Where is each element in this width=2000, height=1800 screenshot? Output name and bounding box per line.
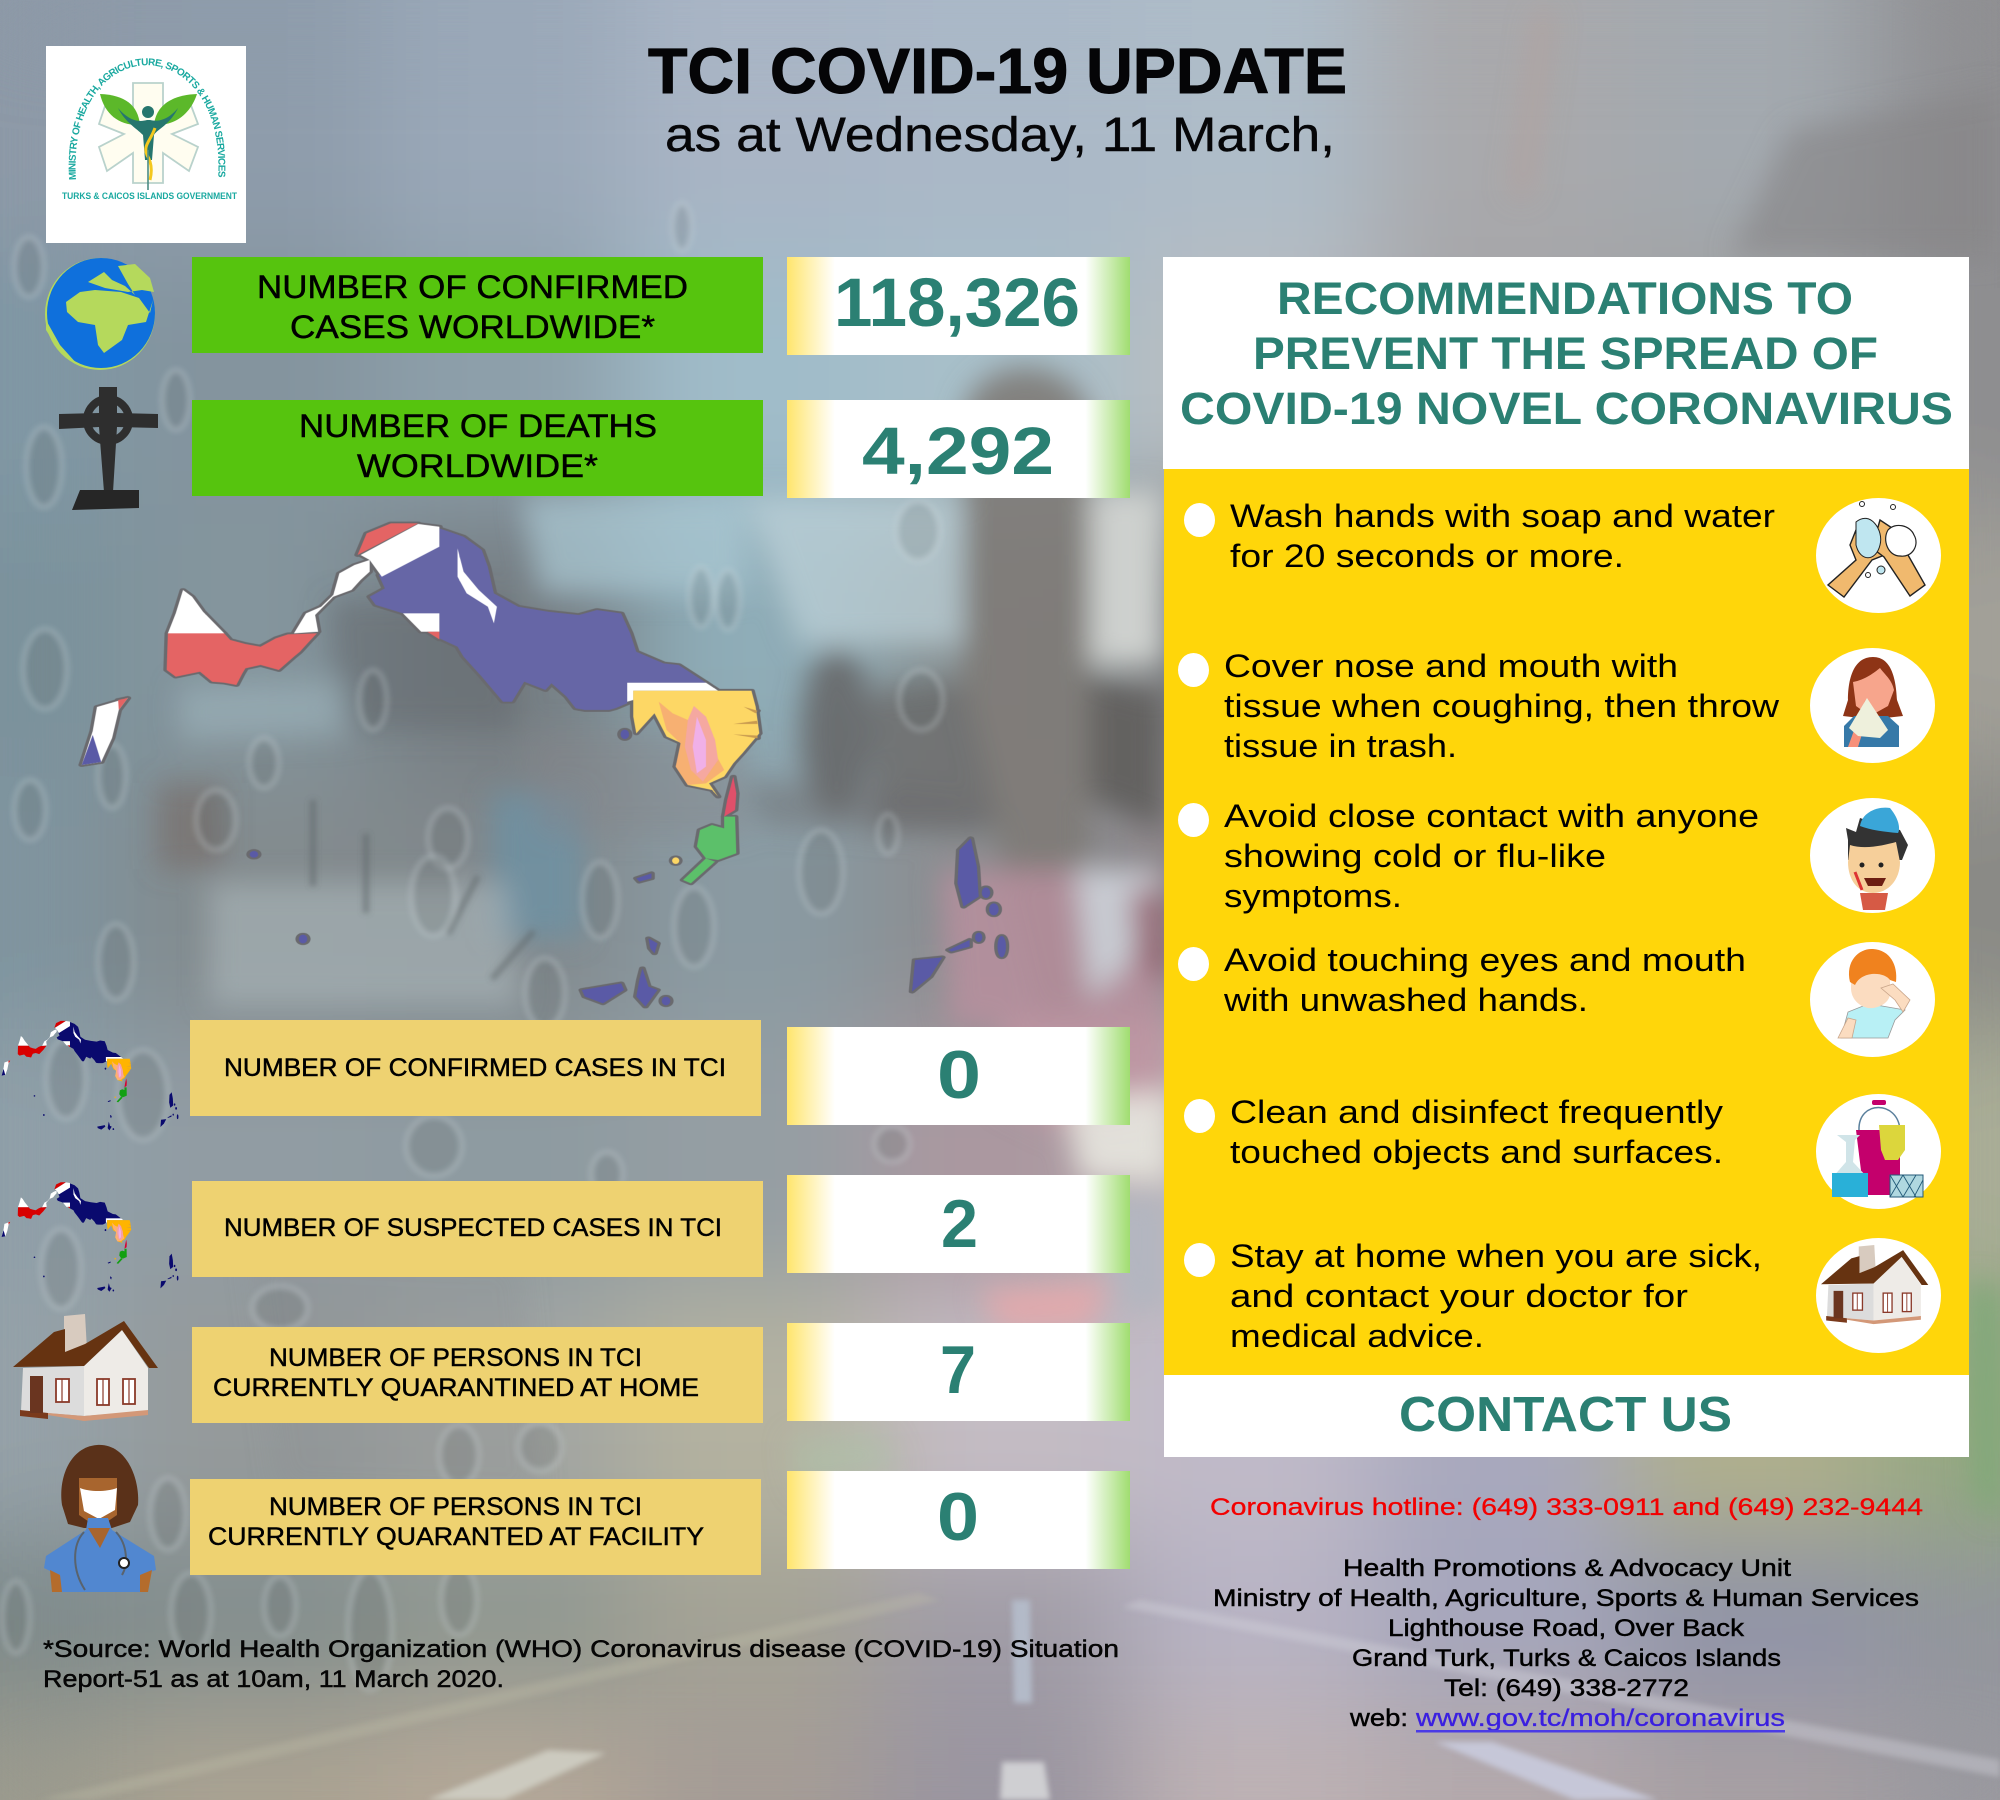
icon: washing hands xyxy=(1816,498,1941,613)
recommendation: stay at home: and contact your doctor for xyxy=(1230,1278,1688,1314)
stat: confirmed cases worldwide: CASES WORLDWIDE* xyxy=(290,309,655,345)
icon: house in circle xyxy=(1816,1238,1941,1353)
recommendation: avoid close contact: Avoid close contact with anyone xyxy=(1224,798,1759,834)
logo: ministry emblem xyxy=(46,46,246,243)
stat: confirmed cases worldwide xyxy=(192,257,1130,355)
icon: cleaning supplies xyxy=(1816,1094,1941,1209)
stat: quarantined at facility: 0 xyxy=(937,1479,979,1555)
icon: woman with tissue xyxy=(1810,648,1935,763)
recommendation: wash hands xyxy=(1184,498,1775,574)
subtitle: date: as at Wednesday, 11 March, xyxy=(665,109,1335,162)
panel: recommendations list xyxy=(1164,469,1969,1375)
recommendation: avoid touching eyes xyxy=(1178,942,1746,1018)
panel: recommendations heading: PREVENT THE SPREAD OF xyxy=(1253,328,1878,379)
recommendation: cover nose and mouth: Cover nose and mouth with xyxy=(1224,648,1678,684)
icon: sick man with ice pack xyxy=(1810,798,1935,913)
contact details: web: xyxy=(1349,1705,1408,1732)
panel: recommendations heading xyxy=(1163,257,1969,469)
contact details: www.gov.tc/moh/coronavirus xyxy=(1415,1705,1785,1732)
stat: quarantined at home xyxy=(192,1323,1130,1423)
recommendation: clean and disinfect: Clean and disinfect frequently xyxy=(1230,1094,1723,1130)
stat: suspected cases in TCI: NUMBER OF SUSPECTED CASES IN TCI xyxy=(224,1214,722,1242)
contact details: Lighthouse Road, Over Back xyxy=(1388,1615,1745,1642)
source note xyxy=(43,1636,1119,1693)
source note: Report-51 as at 10am, 11 March 2020. xyxy=(43,1666,504,1693)
stat: quarantined at home: 7 xyxy=(940,1332,976,1408)
recommendation: clean and disinfect: touched objects and surfaces. xyxy=(1230,1134,1723,1170)
recommendation: avoid touching eyes: with unwashed hands. xyxy=(1223,982,1588,1018)
contact us heading: CONTACT US xyxy=(1399,1388,1732,1442)
recommendation: wash hands: Wash hands with soap and water xyxy=(1230,498,1775,534)
stat: suspected cases in TCI: 2 xyxy=(941,1186,978,1262)
recommendation: stay at home: Stay at home when you are sick, xyxy=(1230,1238,1762,1274)
stat: confirmed cases worldwide: 118,326 xyxy=(834,264,1080,341)
hotline: Coronavirus hotline: (649) 333-0911 and (649) 232-9444 xyxy=(1210,1494,1923,1521)
stat: quarantined at home: CURRENTLY QUARANTINED AT HOME xyxy=(213,1374,699,1402)
icon: boy rubbing eye xyxy=(1810,942,1935,1057)
recommendation: cover nose and mouth: tissue when coughing, then throw xyxy=(1224,688,1780,724)
icon: house xyxy=(13,1314,158,1421)
contact details: Health Promotions & Advocacy Unit xyxy=(1343,1555,1791,1582)
map: Turks and Caicos Islands flag map xyxy=(82,523,1006,1007)
contact us heading xyxy=(1164,1375,1969,1457)
recommendation: wash hands: for 20 seconds or more. xyxy=(1230,538,1624,574)
stat: deaths worldwide xyxy=(192,400,1130,498)
contact details: Tel: (649) 338-2772 xyxy=(1444,1675,1689,1702)
recommendation: avoid close contact xyxy=(1178,798,1759,914)
stat: quarantined at home: NUMBER OF PERSONS IN TCI xyxy=(269,1344,642,1372)
icon: globe xyxy=(45,258,155,370)
recommendation: cover nose and mouth xyxy=(1178,648,1780,764)
stat: quarantined at facility: CURRENTLY QUARANTED AT FACILITY xyxy=(208,1523,704,1551)
contact details xyxy=(1213,1555,1919,1732)
stat: confirmed cases in TCI: 0 xyxy=(937,1037,981,1113)
stat: confirmed cases worldwide: NUMBER OF CONFIRMED xyxy=(257,269,688,305)
icon: mini map confirmed xyxy=(2,1021,178,1130)
stat: deaths worldwide: 4,292 xyxy=(862,414,1054,489)
icon: nurse with mask xyxy=(44,1445,156,1592)
contact details: Ministry of Health, Agriculture, Sports & Human Services xyxy=(1213,1585,1919,1612)
panel: recommendations heading: RECOMMENDATIONS TO xyxy=(1277,273,1853,324)
stat: deaths worldwide: NUMBER OF DEATHS xyxy=(299,408,657,444)
title: TCI COVID-19 UPDATE xyxy=(648,35,1347,107)
recommendation: avoid close contact: symptoms. xyxy=(1224,878,1402,914)
stat: quarantined at facility: NUMBER OF PERSONS IN TCI xyxy=(269,1493,642,1521)
stat: quarantined at facility xyxy=(190,1471,1130,1575)
contact details: Grand Turk, Turks & Caicos Islands xyxy=(1352,1645,1781,1672)
logo: ministry emblem: MINISTRY OF HEALTH, AGRICULTURE, SPORTS & HUMAN SERVICES xyxy=(68,58,226,180)
recommendation: clean and disinfect xyxy=(1184,1094,1723,1170)
recommendation: stay at home xyxy=(1184,1238,1762,1354)
icon: mini map suspected xyxy=(2,1182,178,1292)
source note: *Source: World Health Organization (WHO) Coronavirus disease (COVID-19) Situation xyxy=(43,1636,1119,1663)
icon: celtic cross xyxy=(59,387,158,510)
logo: ministry emblem: TURKS & CAICOS ISLANDS GOVERNMENT xyxy=(62,191,237,202)
stat: confirmed cases in TCI xyxy=(190,1020,1130,1125)
stat: confirmed cases in TCI: NUMBER OF CONFIRMED CASES IN TCI xyxy=(224,1054,726,1082)
recommendation: cover nose and mouth: tissue in trash. xyxy=(1224,728,1457,764)
stat: deaths worldwide: WORLDWIDE* xyxy=(357,448,598,484)
recommendation: avoid touching eyes: Avoid touching eyes and mouth xyxy=(1224,942,1746,978)
recommendation: avoid close contact: showing cold or flu-like xyxy=(1224,838,1606,874)
recommendation: stay at home: medical advice. xyxy=(1230,1318,1484,1354)
stat: suspected cases in TCI xyxy=(192,1175,1130,1277)
panel: recommendations heading: COVID-19 NOVEL CORONAVIRUS xyxy=(1180,383,1953,434)
